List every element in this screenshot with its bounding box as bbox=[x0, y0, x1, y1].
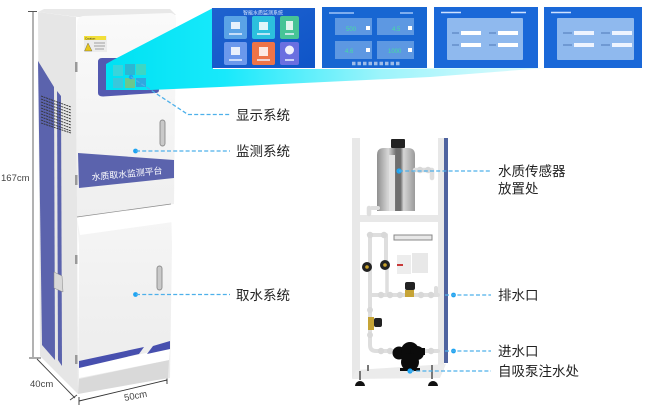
right post bbox=[438, 138, 444, 370]
monitoring platform banner bbox=[78, 153, 174, 188]
lower door highlight bbox=[77, 205, 173, 235]
flow valves bbox=[362, 260, 390, 272]
monitoring platform banner: 水质取水监测平台 bbox=[91, 165, 163, 182]
callout: water intake system: 取水系统 bbox=[236, 288, 290, 303]
callout: water inlet: 进水口 bbox=[498, 344, 538, 359]
screen 1: main menu: 智能水质监测系统 bbox=[243, 10, 283, 16]
hinges bbox=[75, 62, 78, 364]
pipe joints bbox=[367, 167, 434, 354]
solenoid valve upper bbox=[405, 282, 415, 297]
lower handle bbox=[157, 266, 162, 290]
control box bbox=[397, 253, 428, 274]
solenoid valve lower bbox=[368, 317, 382, 330]
callout: monitoring system bbox=[133, 144, 290, 159]
base bbox=[352, 364, 446, 379]
callout: monitoring system: 监测系统 bbox=[236, 144, 290, 159]
lower blue stripe right bbox=[147, 341, 170, 354]
callout: sensor placement: 放置处 bbox=[498, 182, 539, 196]
height dimension: 167cm: 167cm bbox=[1, 173, 30, 184]
screen 2: readings: 500 bbox=[346, 27, 357, 33]
lower blue stripe bbox=[79, 347, 144, 368]
feet bbox=[359, 365, 433, 380]
callout: pump priming point: 自吸泵注水处 bbox=[498, 364, 579, 379]
upper door bbox=[77, 13, 176, 217]
callout: pump priming point bbox=[407, 364, 579, 379]
door seam bbox=[77, 204, 171, 217]
screen 2: readings: 1000 bbox=[388, 49, 402, 55]
side vent bbox=[41, 96, 71, 133]
side latch bbox=[54, 272, 63, 292]
door bottom grey kick plate bbox=[78, 360, 169, 394]
self-priming pump bbox=[392, 342, 425, 371]
equipment frame bbox=[352, 138, 448, 386]
depth dimension: 40cm bbox=[30, 359, 77, 400]
pipes bbox=[369, 170, 438, 351]
side blue strip narrow bbox=[57, 91, 62, 366]
screen 3: settings bbox=[434, 7, 538, 68]
screen bezel bbox=[98, 58, 159, 96]
lower white band bbox=[79, 348, 170, 378]
cabinet screen icons bbox=[113, 64, 146, 88]
water quality sensor tank bbox=[377, 139, 415, 211]
screen 4: parameters bbox=[544, 7, 642, 68]
width dimension: 50cm: 50cm bbox=[123, 389, 148, 404]
callout: sensor placement: 水质传感器 bbox=[498, 163, 566, 179]
shelf bbox=[352, 215, 444, 222]
projection beam bbox=[106, 8, 545, 90]
right blue strip bbox=[444, 138, 448, 363]
warning label bbox=[84, 36, 107, 52]
cabinet side panel bbox=[38, 12, 78, 394]
callout: water intake system bbox=[133, 288, 290, 303]
cabinet bbox=[38, 9, 176, 394]
callout: drain outlet bbox=[445, 288, 538, 303]
height dimension: 167cm bbox=[1, 12, 41, 358]
screen 1: main menu bbox=[212, 8, 315, 68]
side blue stripe bbox=[38, 61, 55, 360]
screen 2: readings: 4.5 bbox=[392, 27, 401, 33]
left post bbox=[352, 138, 360, 378]
cabinet top bbox=[38, 9, 176, 17]
gauge plate bbox=[394, 235, 432, 240]
depth dimension: 40cm: 40cm bbox=[30, 379, 53, 390]
wheels bbox=[355, 381, 438, 386]
warning label: Caution bbox=[85, 36, 96, 40]
callout: drain outlet: 排水口 bbox=[498, 288, 538, 303]
width dimension: 50cm bbox=[79, 377, 167, 405]
callout: display system: 显示系统 bbox=[236, 108, 290, 123]
screen 2: readings bbox=[322, 7, 427, 68]
screen 2: readings: 4.6 bbox=[345, 49, 354, 55]
lower door bbox=[77, 205, 172, 393]
callout: display system bbox=[129, 75, 290, 123]
callout: sensor placement bbox=[396, 163, 566, 196]
upper handle bbox=[160, 120, 165, 146]
callout: water inlet bbox=[445, 344, 538, 359]
